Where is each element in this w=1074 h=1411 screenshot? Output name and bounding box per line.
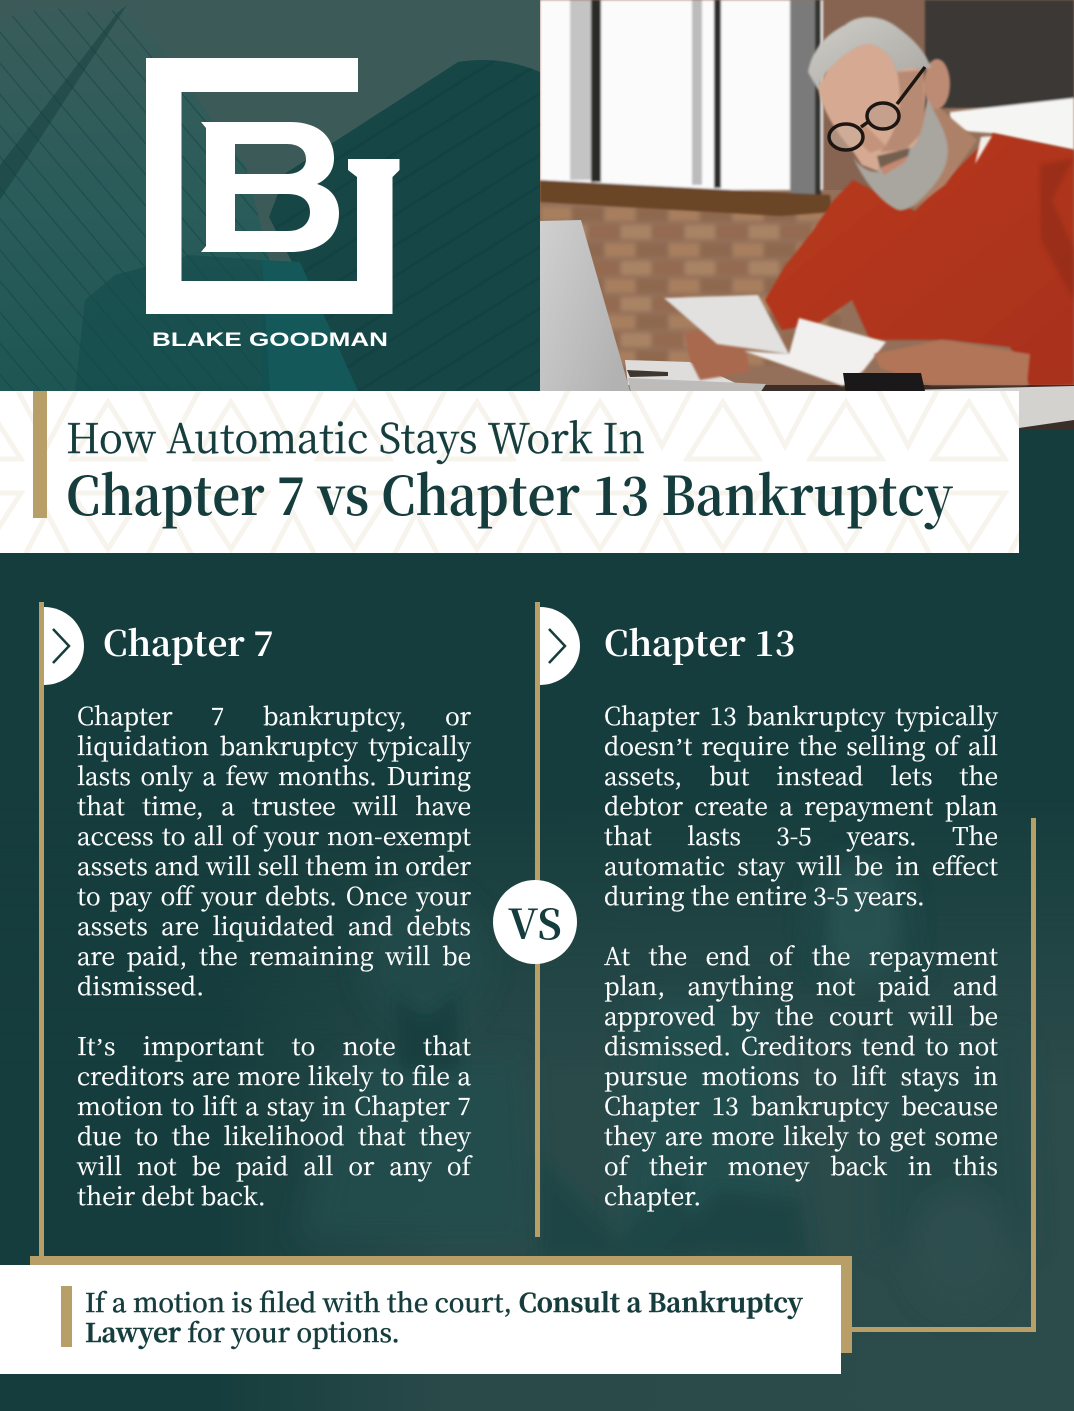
body text: At the end of the repayment xyxy=(604,938,998,973)
title line 2: Chapter 7 vs Chapter 13 Bankruptcy xyxy=(66,455,953,531)
heading: Chapter 7 xyxy=(103,616,274,666)
title accent bar xyxy=(33,391,47,518)
body text: will not be paid all or any of xyxy=(77,1148,471,1183)
body text: chapter. xyxy=(604,1178,701,1213)
ear xyxy=(924,59,950,109)
body text: motion to lift a stay in Chapter 7 xyxy=(77,1088,471,1123)
body text: that lasts 3-5 years. The xyxy=(604,818,998,853)
body text: Chapter 13 bankruptcy typically xyxy=(604,698,998,733)
callout: consult a lawyer xyxy=(0,1256,852,1374)
body text: their debt back. xyxy=(77,1178,266,1213)
callout accent bar xyxy=(61,1286,72,1347)
body text xyxy=(76,698,473,1213)
desk papers xyxy=(625,360,1074,428)
body text: liquidation bankruptcy typically xyxy=(77,728,471,763)
body text: assets and will sell them in order xyxy=(77,848,471,883)
body text: that time, a trustee will have xyxy=(77,788,471,823)
VS badge xyxy=(493,880,577,964)
body text: doesn’t require the selling of all xyxy=(604,728,998,763)
laptop xyxy=(540,220,766,398)
window xyxy=(540,0,832,216)
body text: It’s important to note that xyxy=(77,1028,471,1063)
sweater sleeve shadow xyxy=(1040,158,1074,300)
head xyxy=(808,17,950,210)
face xyxy=(818,44,925,172)
chevron badge xyxy=(540,607,580,685)
body text: to pay off your debts. Once your xyxy=(77,878,471,913)
body text: approved by the court will be xyxy=(604,998,998,1033)
left hand xyxy=(684,330,750,380)
logo letter B xyxy=(201,122,339,252)
body text: during the entire 3-5 years. xyxy=(604,878,925,913)
gold rule xyxy=(39,602,44,1256)
callout text: Lawyer for your options. xyxy=(85,1313,400,1350)
brick wall xyxy=(540,0,1074,430)
lips xyxy=(880,156,908,175)
title band xyxy=(0,391,1019,553)
nose shadow xyxy=(860,123,887,153)
right tower xyxy=(269,60,540,391)
logo: Blake Goodman BG monogram and wordmark xyxy=(146,58,400,351)
body text xyxy=(604,698,998,1213)
hair xyxy=(808,17,931,90)
body text: automatic stay will be in effect xyxy=(604,848,998,883)
body text: due to the likelihood that they xyxy=(77,1118,471,1153)
body text: of their money back in this xyxy=(604,1148,998,1183)
sky xyxy=(0,0,540,391)
panel: Chapter 7 xyxy=(39,602,473,1256)
lower left building xyxy=(75,255,270,391)
body text: access to all of your non-exempt xyxy=(77,818,471,853)
background: blurred people photo overlay xyxy=(288,853,1074,1411)
body text: creditors are more likely to file a xyxy=(77,1058,471,1093)
callout white panel xyxy=(0,1265,841,1374)
body text: dismissed. Creditors tend to not xyxy=(604,1028,998,1063)
body text: lasts only a few months. During xyxy=(77,758,471,793)
left tower xyxy=(0,5,272,391)
right hand xyxy=(874,340,1030,385)
gold rule xyxy=(535,602,540,1237)
body text: assets are liquidated and debts xyxy=(77,908,471,943)
VS badge: VS xyxy=(508,892,562,951)
body text: are paid, the remaining will be xyxy=(77,938,471,973)
heading: Chapter 13 xyxy=(604,616,795,666)
beard xyxy=(853,97,948,210)
logo wordmark: BLAKE GOODMAN xyxy=(152,329,388,351)
callout text xyxy=(85,1283,803,1350)
body text: Chapter 7 bankruptcy, or xyxy=(77,698,471,733)
document pages xyxy=(664,295,886,386)
body text: debtor create a repayment plan xyxy=(604,788,998,823)
center tower xyxy=(262,260,358,391)
upper right dark cabinet and bright window xyxy=(925,0,1074,150)
moustache xyxy=(877,148,910,168)
body text: pursue motions to lift stays in xyxy=(604,1058,998,1093)
body text: they are more likely to get some xyxy=(604,1118,998,1153)
desk xyxy=(632,385,1074,430)
glasses xyxy=(829,67,925,150)
gold frame line: right xyxy=(852,818,1036,1332)
chevron badge xyxy=(44,607,84,685)
header photo: man reviewing paperwork at a desk xyxy=(540,0,1074,430)
body text: Chapter 13 bankruptcy because xyxy=(604,1088,998,1123)
callout text: If a motion is filed with the court, Consult a Bankruptcy xyxy=(85,1283,803,1320)
neck and tee xyxy=(885,100,992,207)
title line 1: How Automatic Stays Work In xyxy=(66,406,645,465)
sweater xyxy=(765,133,1074,386)
callout gold backing xyxy=(30,1256,852,1353)
logo bracket xyxy=(146,58,400,314)
calculator xyxy=(843,373,925,393)
panel: Chapter 13 xyxy=(535,602,998,1237)
header left: building photo background xyxy=(0,0,540,391)
body text: plan, anything not paid and xyxy=(604,968,998,1003)
body text: dismissed. xyxy=(77,968,204,1003)
body text: assets, but instead lets the xyxy=(604,758,998,793)
